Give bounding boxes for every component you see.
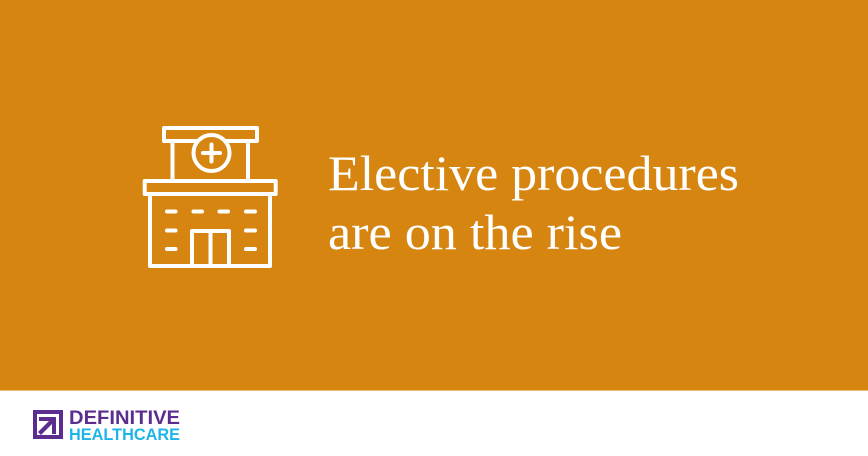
heading: Elective procedures bbox=[328, 145, 739, 201]
logo wordmark: DEFINITIVE bbox=[69, 407, 180, 429]
heading bbox=[328, 145, 739, 260]
heading: are on the rise bbox=[328, 204, 622, 260]
logo wordmark: HEALTHCARE bbox=[69, 425, 180, 444]
logo wordmark bbox=[69, 407, 180, 444]
logo: Definitive Healthcare bbox=[33, 407, 180, 444]
icon: hospital building bbox=[145, 128, 276, 266]
logo mark bbox=[33, 410, 63, 439]
